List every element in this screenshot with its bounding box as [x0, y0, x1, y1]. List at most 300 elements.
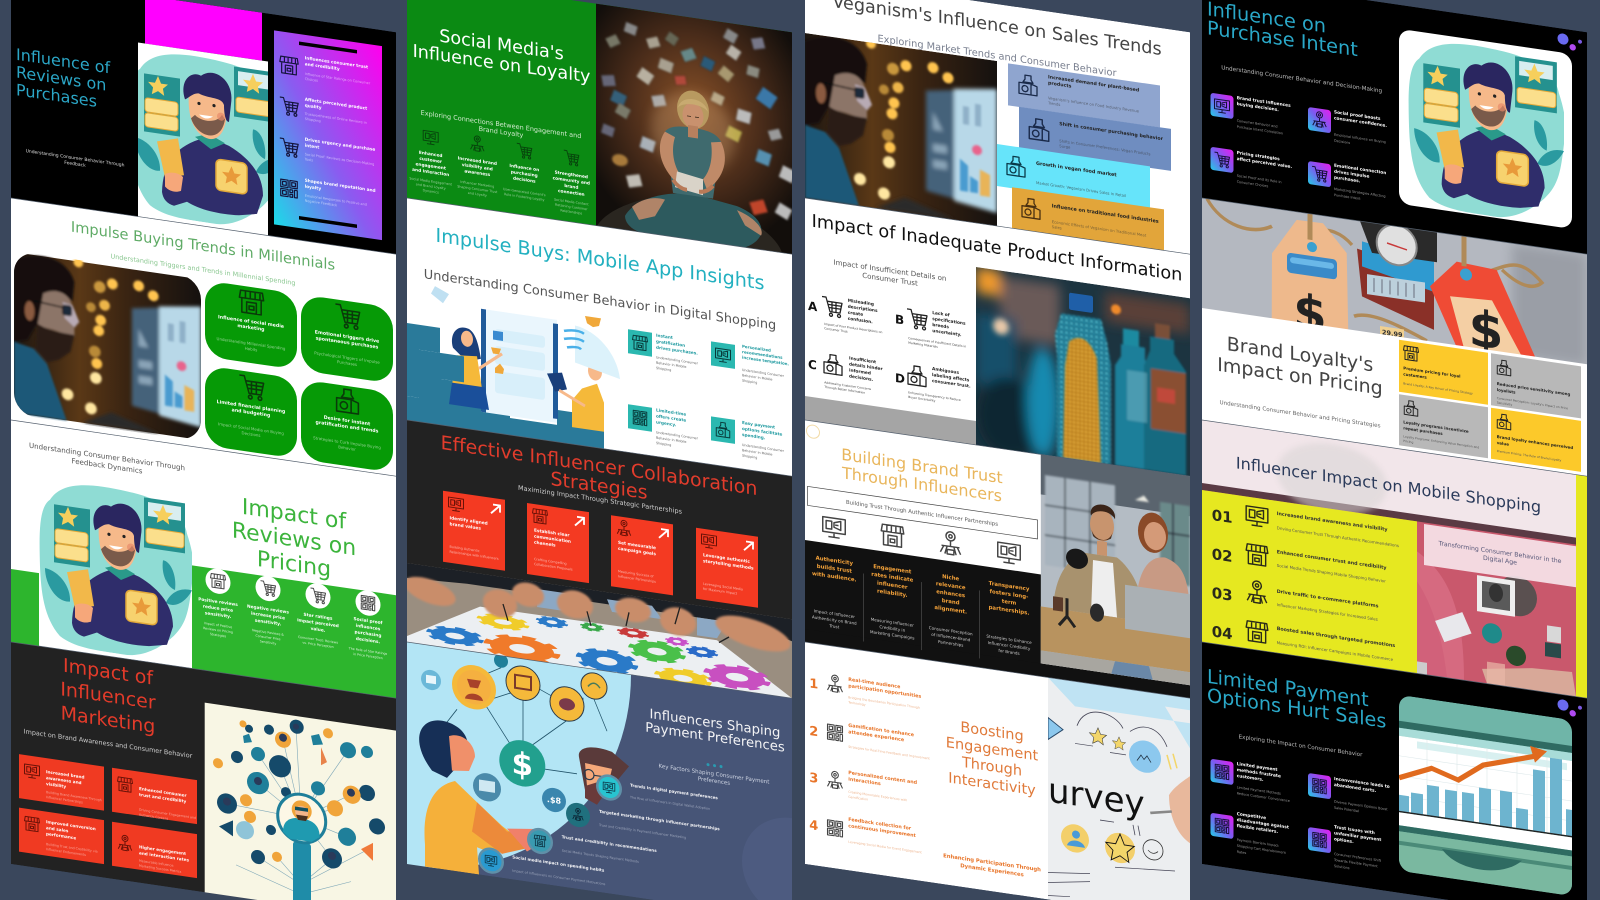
cell: loyalty programs: [1399, 394, 1488, 458]
heading: Reviews on: [16, 63, 106, 95]
slide: Influence on Purchase Intent: [1202, 0, 1587, 254]
item: urgency: Tools: [304, 157, 313, 163]
caption: transparency: Strategies to Enhance: [986, 634, 1032, 645]
panel: black band: [805, 540, 1190, 698]
heading: Boosting: [960, 719, 1024, 745]
item: trends: The Rise of Influencers in Digital Wallet Adoption: [629, 795, 710, 811]
item A: Misleading: [848, 298, 874, 308]
cell: price sensitivity: Consumer Perception: Loyalty's Impact on Price: [1497, 396, 1568, 410]
card: social media marketing: Influence of social media: [218, 314, 284, 330]
item: purchasing: decisions: [513, 175, 536, 185]
item: engagement: engagement: [415, 161, 446, 172]
image: price tags on a scale: $: [1469, 298, 1503, 362]
column: engagement: Engagement: [873, 564, 912, 576]
item: purchasing: Influence on: [509, 163, 539, 173]
item: limited-time offers: urgency.: [656, 419, 677, 427]
item: engagement: [409, 128, 453, 197]
item: flexible retailers: Payment Barriers Impact: [1237, 838, 1279, 848]
item: purchasing: Role in Fostering Loyalty: [504, 192, 544, 202]
column: engagement: influencer: [877, 581, 908, 591]
slide: Limited Payment Options Hurt Sales: [1202, 642, 1587, 900]
item: limited-time offers: [628, 403, 699, 451]
card: consumer trust: [112, 768, 197, 825]
card: financial planning: [205, 365, 297, 459]
item C: informed: [849, 367, 871, 377]
heading: Impact of: [63, 654, 154, 690]
heading: Purchases: [16, 80, 97, 111]
item: urgency: intent: [305, 143, 319, 151]
card: financial planning: and budgeting: [232, 407, 270, 419]
item: visibility: Shaping Consumer Trust: [457, 184, 498, 194]
item: limited methods: [1210, 757, 1290, 803]
card: storytelling: [696, 528, 758, 608]
heading: Strategies: [550, 467, 648, 504]
item: recommendations: recommendations: [742, 349, 783, 360]
card: campaign goals: Set measurable: [618, 540, 656, 551]
card: traditional food industries: Sales: [1052, 224, 1062, 230]
item A: Impact of Poor Product Descriptions on: [824, 322, 883, 334]
card: instant gratification: gratification and trends: [316, 419, 379, 435]
item: trends: [596, 773, 718, 816]
heading: Reviews on: [232, 517, 356, 561]
caption: engagement: Measuring Influencer: [871, 617, 914, 628]
card: communication: Collaboration Proposals: [534, 562, 573, 572]
item: pricing strategies: Consumer Choices: [1237, 180, 1269, 188]
row 04: 04: [1212, 622, 1233, 643]
card: emotional triggers: Purchases: [337, 359, 357, 367]
item: targeted marketing: [566, 801, 720, 848]
item: urgency: [280, 137, 376, 166]
card: consumer trust: Driving Consumer Engagement and: [139, 808, 196, 820]
subtitle box: Building Trust Through Authentic Influencer Partnerships: [846, 500, 998, 528]
item B: [895, 305, 966, 353]
card: emotional triggers: Emotional triggers drive: [315, 329, 379, 345]
card: conversion: Influencer Endorsements: [46, 847, 86, 857]
item B: uncertainty.: [932, 328, 962, 338]
item: visibility: awareness: [464, 168, 491, 178]
slide: Impact of Influencer Marketing: [11, 642, 397, 900]
arrow: [659, 529, 668, 539]
item B: B: [895, 312, 904, 327]
panel: green band: [192, 565, 396, 698]
item: gratification: drives purchases.: [656, 345, 698, 356]
cell: loyalty programs: repeat purchases: [1403, 425, 1443, 436]
caption: niche: Consumer Perception: [929, 625, 973, 637]
item: brand trust: Consumer Behavior and: [1237, 119, 1278, 129]
magnifier: [278, 791, 326, 900]
subtitle: Feedback Dynamics: [72, 456, 143, 476]
heading: Social Media's: [439, 27, 564, 65]
item: positive reviews: sensitivity.: [205, 610, 232, 620]
column: niche: enhances: [936, 589, 965, 599]
heading: Limited Payment: [1207, 665, 1369, 711]
item: gratification: [628, 329, 699, 376]
item 2: Strategies for Real-Time Feedback and Improvement: [848, 745, 930, 761]
item: emotional connection: Marketing Strategies Affecting: [1334, 187, 1386, 198]
white panel: [1202, 308, 1587, 476]
item: engagement: and interaction: [412, 167, 449, 178]
column 1 of slides: [11, 0, 397, 900]
heading: Influencer Impact on Mobile Shopping: [1236, 453, 1541, 517]
card: consumer trust: trust and credibility: [139, 792, 186, 804]
item: recommendations: Personalized: [742, 344, 771, 353]
item: trust: [279, 56, 370, 84]
item: social proof: Decisions: [1334, 139, 1350, 145]
card: financial planning: Decisions: [242, 430, 260, 438]
slide: Impulse Buys: Mobile App Insights: [407, 198, 792, 476]
item: social proof: decisions.: [356, 636, 380, 645]
row 01: Driving Consumer Trust Through Authentic Recommendations: [1277, 525, 1399, 548]
item: positive reviews: Strategies: [210, 632, 226, 638]
item: quality: Affects perceived product: [305, 97, 367, 112]
heading: Marketing: [61, 701, 155, 738]
card: financial planning: Limited financial planning: [217, 399, 285, 415]
item: recommendations: increase temptation.: [742, 355, 790, 367]
item: star ratings: value.: [311, 626, 326, 634]
item C: [808, 349, 883, 397]
card: brand values: Building Authentic: [450, 545, 480, 553]
slide: Boosting Engagement Through Interactivity: [805, 642, 1190, 900]
item: engagement: and Brand Loyalty: [416, 182, 446, 191]
caption: authenticity: Authenticity on Brand: [812, 614, 857, 626]
item 4: 4: [809, 818, 818, 834]
item C: Through Better Information: [823, 385, 865, 395]
item: social media impact: Impact of Influencers on Consumer Payment Motivations: [512, 869, 606, 886]
card: financial planning: Impact of Social Media on Buying: [218, 421, 284, 436]
item: gratification: Shopping: [656, 366, 671, 372]
heading: Purchase Intent: [1207, 16, 1358, 61]
item: community: Social Media Content: [554, 197, 589, 207]
item: trust: and credibility: [305, 61, 340, 72]
item: trust and credibility: Trust and credibility in recommendations: [562, 834, 657, 853]
card: communication: channels: [534, 540, 556, 549]
item: social media impact: Social media impact on spending habits: [512, 854, 605, 873]
card: campaign goals: campaign goals: [618, 546, 656, 557]
item: social proof: influences: [356, 623, 381, 632]
item A: Consumer Trust: [824, 326, 849, 334]
subtitle: Exploring the Impact on Consumer Behavior: [1239, 734, 1363, 759]
card: conversion: [19, 808, 104, 864]
card: social media marketing: Habits: [245, 346, 257, 352]
item: community: Relationships: [560, 208, 582, 216]
cell: price sensitivity: Sensitivity: [1497, 401, 1512, 407]
card: storytelling: storytelling methods: [703, 558, 754, 572]
slide: Social Media's Influence on Loyalty: [407, 0, 796, 255]
card: consumer trust: Authentic Content: [139, 813, 169, 821]
heading: Impulse Buying Trends in Millennials: [71, 219, 335, 274]
heading: Influencer: [60, 677, 156, 714]
heading: Impact of Inadequate Product Information: [812, 211, 1182, 286]
card: brand awareness: [19, 754, 104, 811]
item: trust and credibility: [527, 826, 657, 871]
item: brand trust: Purchase Intent Correlation: [1237, 125, 1283, 136]
card: communication: communication: [534, 534, 571, 545]
image: payment network illustration: [183, 385, 631, 899]
item: easy payment: Shopping: [742, 454, 757, 460]
caption: authenticity: Impact of Influencer: [814, 608, 855, 619]
item: flexible retailers: Rates: [1237, 850, 1246, 855]
item: recommendations: Shopping: [742, 379, 757, 385]
card: engagement: Higher engagement: [139, 844, 186, 856]
item: limited-time offers: Understanding Consumer: [656, 430, 699, 441]
item: limited-time offers: Limited-time: [656, 407, 686, 417]
item: engagement: Social Media Engagement: [409, 176, 453, 187]
row 02: [1212, 539, 1387, 589]
item: negative reviews: Sensitivity: [260, 639, 276, 646]
item: emotional connection: [1308, 159, 1386, 205]
slide: Influencer Impact on Mobile Shopping: [1202, 420, 1587, 698]
item: limited methods: methods frustrate: [1237, 767, 1281, 780]
item 3: [809, 764, 918, 809]
item: social proof: purchasing: [355, 629, 381, 639]
item: engagement: customer: [419, 156, 443, 165]
caption: transparency: for Brands: [998, 648, 1020, 656]
item: social proof: in Price Perception: [353, 652, 383, 660]
card: market growth: Growth in vegan food market: [1036, 161, 1117, 179]
item: easy payment: Behavior in Mobile: [742, 448, 772, 457]
item: easy payment: Easy payment: [742, 420, 775, 430]
cell: premium pricing: [1399, 340, 1488, 405]
card: campaign goals: Influencer Partnerships: [618, 574, 656, 584]
image: price tags on a scale: [1202, 197, 1587, 382]
card: plant-based demand: products: [1048, 80, 1072, 90]
item: emotional connection: drives impulse: [1334, 169, 1369, 180]
card: brand awareness: awareness and: [46, 775, 82, 785]
item: easy payment: options facilitate: [742, 426, 782, 437]
heading: Options Hurt Sales: [1207, 684, 1386, 733]
item: social proof: Emotional Influence on Buying: [1334, 133, 1386, 144]
caption: niche: of Influencer-Brand: [931, 632, 971, 642]
item: gratification: Instant: [656, 333, 673, 340]
item 1: participation opportunities: [848, 683, 921, 700]
column 4 of slides: [1202, 0, 1587, 900]
column: transparency: term: [1002, 599, 1017, 607]
slide: Impulse Buying Trends in Millennials: [11, 198, 396, 476]
item: star ratings: Star ratings: [304, 612, 333, 622]
slide: Effective Influencer Collaboration Strategies: [402, 419, 793, 703]
item: abandoned carts: [1308, 772, 1390, 818]
item: limited-time offers: Shopping: [656, 441, 671, 447]
subtitle: Understanding Consumer Behavior Through: [26, 148, 125, 169]
item: limited-time offers: Behavior in Mobile: [656, 436, 686, 444]
image: glowing water bottles: [976, 267, 1190, 484]
item: reputation: Emotional Responses to Positive and: [305, 194, 367, 207]
heading: Payment Preferences: [645, 720, 785, 756]
item A: confusion.: [848, 316, 873, 325]
caption: authenticity: Trust: [828, 623, 840, 630]
cell: perceived value: [1491, 408, 1581, 472]
item D: Enhancing Transparency to Reduce: [908, 390, 961, 402]
arrow: [744, 541, 753, 552]
slide: Influencers Shaping Payment Preferences: [183, 385, 842, 900]
item: social proof: Social proof boosts: [1334, 109, 1381, 122]
cell: loyalty programs: Loyalty programs incentivize: [1403, 419, 1469, 434]
item: trust issues: options.: [1334, 836, 1354, 845]
item: reputation: Shapes brand reputation and: [305, 178, 376, 194]
cell: premium pricing: Brand Loyalty: A Key Driver of Pricing Strategy: [1403, 381, 1473, 396]
card: communication: [527, 503, 589, 583]
item: recommendations: Behavior in Mobile: [742, 373, 772, 382]
cell: premium pricing: customers: [1403, 371, 1427, 380]
column: authenticity: with audience.: [812, 571, 857, 584]
callout: Transforming Consumer Behavior in the: [1438, 540, 1562, 565]
item: community: Strengthened: [555, 170, 588, 180]
subtitle: Dynamic Experiences: [960, 863, 1024, 878]
card: brand awareness: Increased brand: [46, 769, 84, 780]
item: urgency: Drives urgency and purchase: [305, 137, 375, 153]
column: niche: brand: [942, 598, 960, 607]
row 03: Influencer Marketing Strategies for Increased Sales: [1277, 602, 1378, 622]
slide: Impact of Reviews on Pricing: [11, 420, 396, 698]
image: man at monitor: [14, 248, 201, 440]
row 04: Boosted sales through targeted promotions: [1277, 626, 1395, 649]
row 02: 02: [1212, 545, 1233, 566]
item: visibility: [457, 133, 498, 199]
item: visibility: visibility and: [462, 162, 493, 173]
image: reviewer cartoon: [138, 42, 268, 236]
slide boundary lines: [11, 198, 396, 698]
card: brand values: [443, 491, 505, 571]
item: pricing strategies: affect perceived value.: [1237, 156, 1292, 170]
card: traditional food industries: Economic Effects of Veganism on Traditional Meat: [1052, 219, 1147, 238]
item: brand trust: [1210, 91, 1291, 137]
item 1: Bridging the Boundaries Participation Through: [848, 695, 920, 710]
card: brand awareness: Building Brand Awareness Through: [46, 790, 102, 802]
item: gratification: gratification: [656, 339, 685, 348]
item: pricing strategies: Pricing strategies: [1237, 150, 1280, 162]
cell: premium pricing: Premium pricing for loyal: [1403, 365, 1461, 379]
icons row: [823, 513, 1020, 565]
subtitle: Key Factors Shaping Consumer Payment: [659, 764, 770, 786]
card: storytelling: Leveraging Social Media: [703, 582, 743, 592]
item: recommendations: [711, 339, 790, 389]
item 1: Technology: [847, 700, 866, 707]
row 02: Social Media Trends Shaping Mobile Shopping Behavior: [1277, 563, 1386, 584]
item 1: Real-time audience: [848, 677, 901, 690]
subtitle: Exploring Connections Between Engagement and: [421, 109, 581, 140]
caption: transparency: Influencer Credibility: [988, 640, 1031, 651]
item D: Buyer Uncertainty: [908, 395, 936, 403]
subtitle: Understanding Consumer Behavior in Digital Shopping: [424, 267, 776, 334]
item: trust issues: Trust issues with: [1334, 824, 1375, 836]
item: purchasing: User-Generated Content's: [503, 187, 546, 197]
card: storytelling: Leverage authentic: [703, 552, 750, 565]
card: conversion: and sales: [46, 825, 69, 833]
cell: loyalty programs: Loyalty Programs: Enhancing Value Perception and: [1403, 434, 1479, 449]
item: brand trust: Brand trust influences: [1237, 95, 1291, 109]
card: purchasing shift: Shift in consumer purchasing behavior: [1059, 121, 1164, 142]
item: purchasing: [503, 141, 546, 202]
item A: create: [848, 310, 863, 318]
arrow: [575, 517, 584, 527]
column 3 of slides: [805, 0, 1195, 900]
card: emotional triggers: [301, 294, 393, 384]
item: pricing strategies: Social Proof and its Role in: [1237, 174, 1282, 184]
item: social proof: Social proof: [354, 616, 383, 626]
item: positive reviews: Positive reviews: [198, 596, 238, 608]
image: reviewer cartoon card: [1399, 29, 1572, 229]
image: payment network illustration: $: [512, 745, 533, 784]
item: star ratings: vs. Price Perception: [302, 641, 334, 649]
item: community: connection: [558, 188, 585, 198]
card: brand awareness: visibility: [46, 781, 66, 789]
slide: Veganism's Influence on Sales Trends: [805, 0, 1190, 254]
item 3: Creating Memorable Experiences with: [848, 790, 907, 802]
item: star ratings: [297, 580, 339, 650]
item: positive reviews: Impact of Positive: [204, 621, 232, 629]
caption: engagement: Marketing Campaigns: [870, 629, 915, 641]
callout: Digital Age: [1483, 555, 1517, 567]
card: plant-based demand: Increased demand for plant-based: [1048, 74, 1139, 94]
item: trust: Choices: [305, 77, 318, 83]
item: engagement: Enhanced: [419, 150, 442, 159]
card: emotional triggers: Psychological Triggers of Impulse: [314, 350, 380, 365]
card: brand values: brand values: [450, 521, 481, 532]
card: conversion: performance: [46, 831, 76, 841]
item: flexible retailers: Shopping Cart Abandonment: [1237, 844, 1287, 855]
item: trust: Influence of Star Ratings on Consumer: [305, 72, 371, 86]
subtitle: Maximizing Impact Through Strategic Partnerships: [518, 484, 683, 516]
slide boundary lines: [805, 198, 1190, 698]
item: purchasing: purchasing: [511, 169, 538, 179]
card: plant-based demand: Trends: [1047, 100, 1060, 107]
cell: price sensitivity: loyalists: [1497, 387, 1516, 395]
image: man at monitor: [805, 29, 997, 226]
item: social proof: [348, 588, 388, 661]
item: community: Retaining Customer: [555, 203, 588, 211]
column: engagement: reliability.: [877, 589, 908, 599]
item: pricing strategies: [1210, 146, 1292, 192]
column: authenticity: Authenticity: [816, 556, 853, 567]
card: conversion: Building Trust and Credibility via: [46, 842, 98, 854]
item 2: attendee experience: [848, 729, 905, 743]
item: flexible retailers: disadvantage against: [1237, 817, 1289, 831]
item B: breeds: [932, 322, 949, 330]
item: negative reviews: Consumer Price: [255, 634, 281, 641]
card: storytelling: for Maximum Impact: [703, 587, 738, 596]
image: woman with phone amid photos: [596, 4, 796, 255]
decorative circle: [742, 811, 842, 900]
item: quality: Shopping: [305, 117, 321, 123]
item C: Addressing Customer Concerns: [824, 380, 872, 391]
image: influencer network tree: [205, 703, 397, 900]
item: positive reviews: reduce price: [203, 604, 233, 614]
image: price tags on a scale: $: [1293, 284, 1327, 344]
item 4: Feedback collection for: [848, 817, 912, 832]
item: reputation: loyalty: [305, 184, 321, 192]
decorative dots: [1558, 699, 1582, 718]
subtitle: Impact on Brand Awareness and Consumer Behavior: [24, 727, 193, 760]
item: limited methods: Limited payment: [1237, 761, 1277, 773]
item: easy payment: Understanding Consumer: [742, 443, 785, 453]
cell: price sensitivity: [1491, 353, 1581, 418]
card: market growth: [997, 144, 1150, 208]
image: couple with camera: [1040, 454, 1195, 687]
item D: consumer trust.: [932, 378, 971, 390]
item: easy payment: [711, 415, 785, 464]
item A: [808, 292, 883, 339]
subtitle: Preferences: [698, 776, 730, 787]
item B: Lack of: [932, 310, 950, 319]
heading: Effective Influencer Collaboration: [441, 431, 757, 500]
column: transparency: Transparency: [989, 581, 1030, 593]
callout: [1424, 524, 1576, 587]
card: campaign goals: Measuring Success of: [618, 569, 654, 579]
card: social media marketing: marketing: [237, 323, 265, 333]
header photo texture: [1202, 420, 1576, 545]
heading: Brand Loyalty's: [1227, 332, 1373, 376]
item: brand trust: buying decisions.: [1237, 101, 1279, 113]
